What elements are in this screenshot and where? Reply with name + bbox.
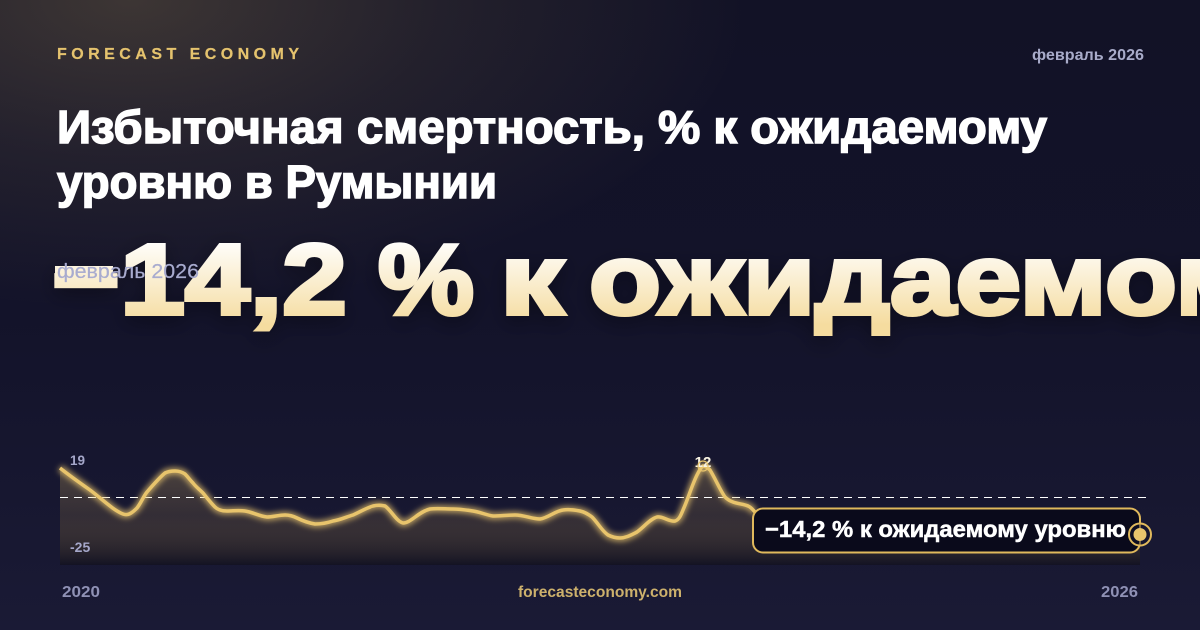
- title: [57, 101, 1047, 208]
- axis max label: 19: [70, 453, 85, 468]
- big headline value: −14,2: [52, 224, 347, 336]
- line chart: [60, 466, 1146, 565]
- callout: current value: −14,2 % к ожидаемому уровню: [765, 516, 1126, 542]
- minus bar: [55, 266, 113, 286]
- x axis end year: 2026: [1101, 584, 1138, 601]
- axis min label: -25: [70, 539, 90, 555]
- overlapping date: февраль 2026: [57, 261, 199, 283]
- peak marker: [698, 461, 708, 471]
- big headline value: ожидаемо: [589, 224, 1177, 336]
- callout: current value: [753, 508, 1140, 552]
- big headline value: к: [500, 224, 565, 336]
- x axis start year: 2020: [62, 584, 100, 601]
- peak value label: 12: [695, 454, 711, 471]
- chart area fill: [60, 466, 1140, 565]
- dashed reference line: [60, 496, 1146, 498]
- title: уровню в Румынии: [57, 156, 497, 208]
- source url: forecasteconomy.com: [518, 584, 682, 601]
- date top right: февраль 2026: [1032, 47, 1144, 64]
- data line: [60, 466, 755, 538]
- big headline value: [52, 224, 1200, 336]
- end point marker: [1129, 524, 1151, 546]
- title: Избыточная смертность, % к ожидаемому: [57, 101, 1047, 153]
- big headline value: %: [378, 224, 474, 336]
- line glow: [60, 466, 755, 538]
- brand label: FORECAST ECONOMY: [57, 46, 299, 63]
